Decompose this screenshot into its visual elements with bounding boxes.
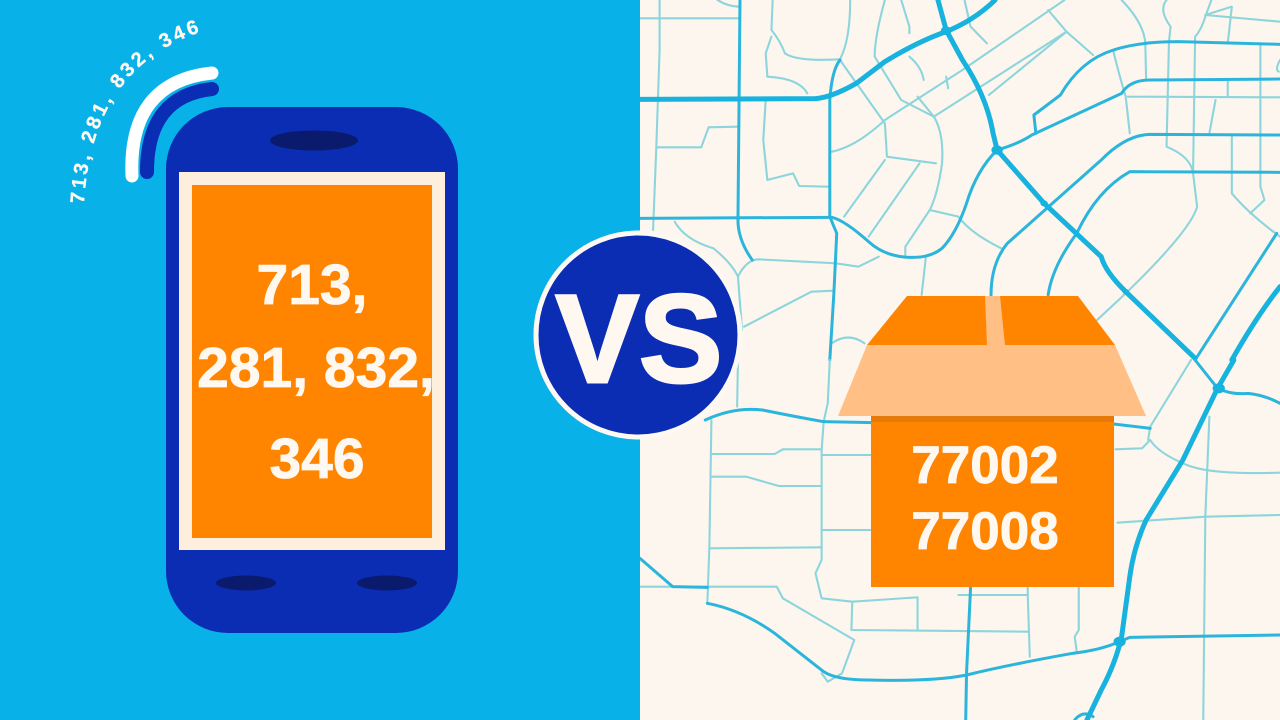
icon: package box bbox=[838, 296, 1146, 587]
box front flap bbox=[838, 345, 1146, 416]
curved phone number text: 713, 281, 832, 346 bbox=[70, 20, 198, 202]
phone buttons bbox=[216, 576, 417, 590]
VS badge: VS bbox=[556, 270, 722, 409]
road junctions upper bbox=[941, 26, 1129, 294]
phone speaker bbox=[270, 130, 358, 150]
phone number: 346 bbox=[269, 427, 365, 491]
panel: map background bbox=[640, 0, 1280, 720]
box lid top flaps bbox=[867, 296, 1115, 345]
ZIP codes: 77002 bbox=[911, 436, 1059, 495]
road junctions lower bbox=[1113, 383, 1225, 647]
ZIP codes: 77008 bbox=[911, 502, 1059, 561]
street map upper half bbox=[640, 0, 1280, 360]
box body bbox=[871, 416, 1114, 587]
phone number bbox=[197, 253, 435, 491]
phone number: 713, bbox=[257, 253, 367, 317]
phone number: 281, 832, bbox=[197, 336, 435, 400]
icon: smartphone bbox=[166, 107, 458, 633]
panel: phone side background bbox=[0, 0, 640, 720]
ZIP codes bbox=[911, 436, 1059, 561]
icon: signal arcs bbox=[132, 73, 212, 176]
phone screen bbox=[179, 172, 445, 550]
street map lower half bbox=[640, 360, 1280, 720]
VS badge bbox=[536, 233, 740, 437]
